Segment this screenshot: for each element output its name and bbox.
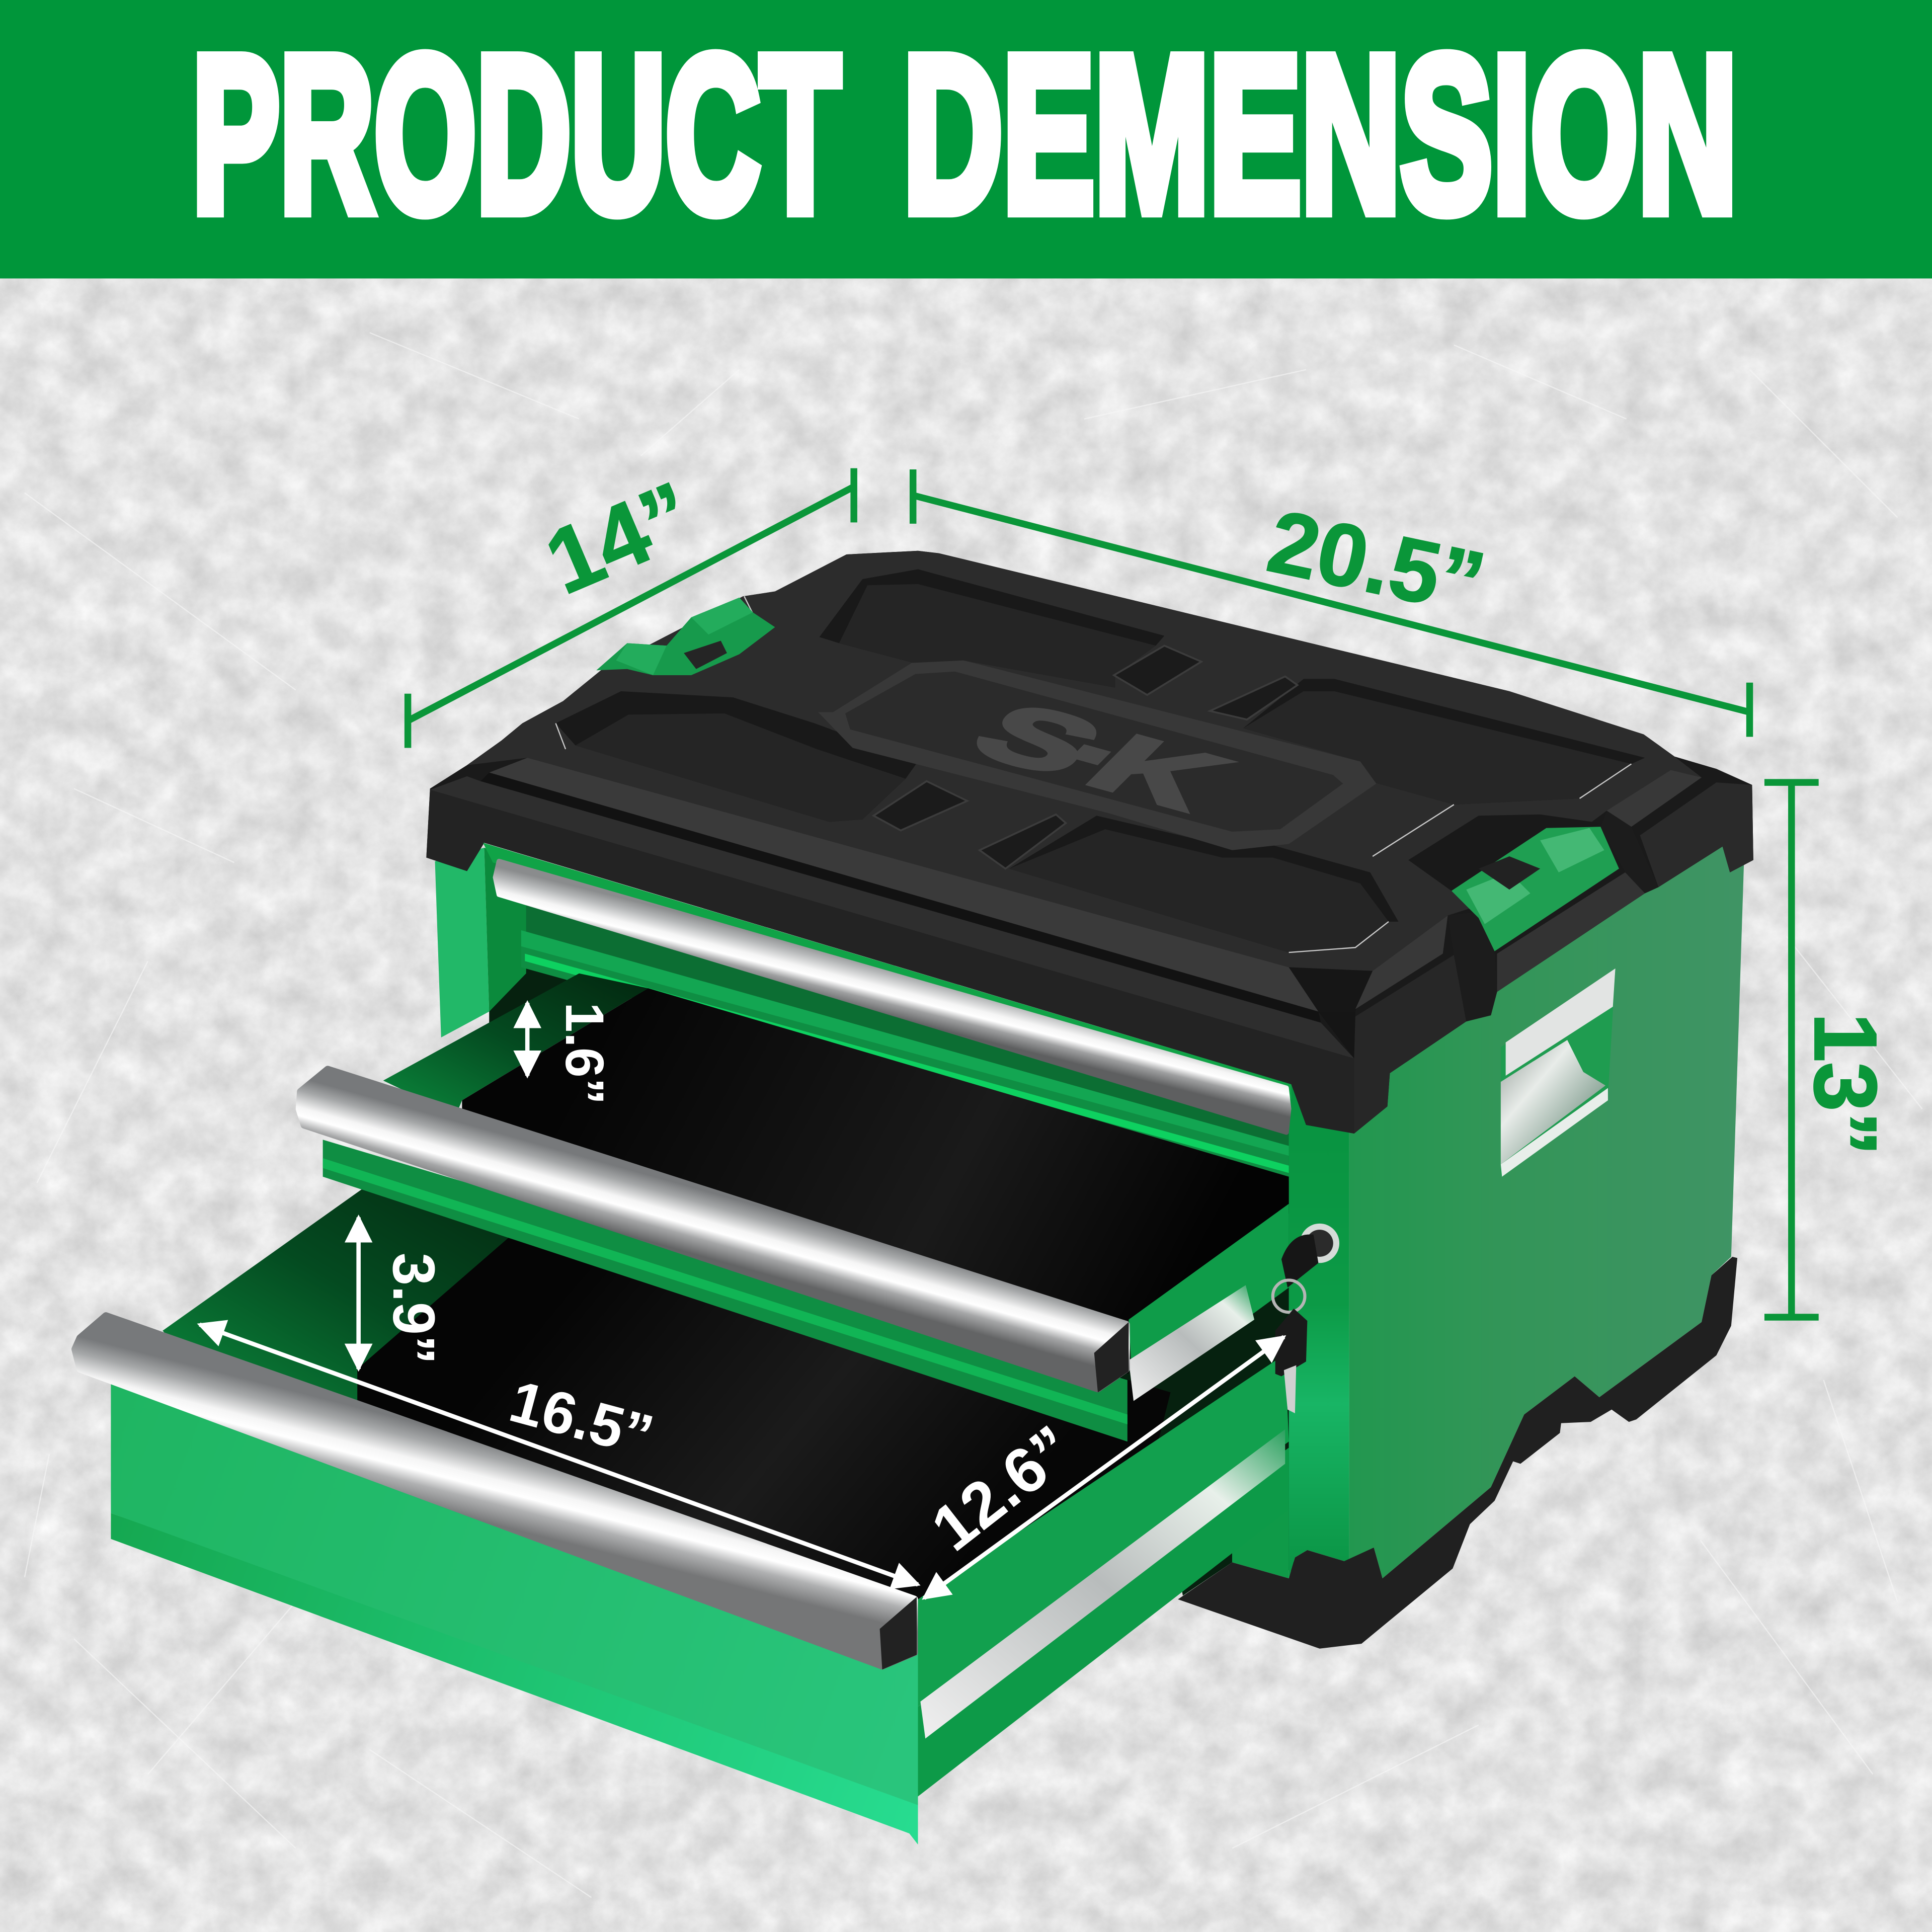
lid centre raised rim xyxy=(818,661,1377,850)
lid handle recesses xyxy=(873,646,1298,869)
title text: PRODUCT xyxy=(192,11,840,258)
bottom drawer front panel xyxy=(111,1367,918,1811)
lid highlight edges xyxy=(555,596,1631,952)
bottom drawer flange xyxy=(111,1513,918,1844)
toolbox xyxy=(75,551,1753,1844)
bottom drawer interior xyxy=(163,1177,1171,1614)
middle drawer front lip xyxy=(323,1140,1128,1441)
middle drawer handle xyxy=(299,1070,1126,1389)
lid panel: centre xyxy=(845,672,1343,832)
title banner xyxy=(0,0,1932,278)
dimension: 14 inch depth xyxy=(408,462,854,748)
dimension: 3.9 inch drawer height: 3.9” xyxy=(381,1253,447,1364)
black base bumper xyxy=(1178,1257,1737,1649)
dimension: 20.5 inch width xyxy=(913,469,1750,737)
bottom drawer rail xyxy=(920,1429,1285,1739)
dimension: 14 inch depth: 14” xyxy=(532,462,707,614)
lid panel: left xyxy=(576,713,906,822)
dimension: 13 inch height xyxy=(1764,782,1895,1317)
left latch xyxy=(596,598,775,675)
dimension: 12.6 inch drawer depth: 12.6” xyxy=(919,1412,1086,1564)
dimension: 16.5 inch drawer width: 16.5” xyxy=(503,1368,660,1469)
dimension: 1.6 inch drawer height: 1.6” xyxy=(554,1002,615,1105)
lid front skirt xyxy=(426,790,1354,1134)
middle drawer xyxy=(299,974,1289,1441)
lid xyxy=(426,551,1753,1134)
middle drawer rail xyxy=(1129,1285,1254,1401)
bottom drawer side xyxy=(918,1354,1289,1707)
lid panel: front xyxy=(1009,829,1389,952)
dimension: 13 inch height: 13” xyxy=(1796,1013,1895,1156)
S.K logo: S·K xyxy=(949,686,1249,826)
top drawer xyxy=(483,843,1292,1180)
lid top rim xyxy=(467,551,1702,971)
lid panels xyxy=(576,584,1631,952)
side carry handle xyxy=(1501,969,1616,1177)
lid panel bevels xyxy=(555,569,1645,952)
bottom drawer handle xyxy=(75,1316,914,1666)
dimension: 12.6 inch drawer depth xyxy=(919,1337,1284,1598)
lid panel: right xyxy=(1243,691,1631,804)
lid corner facets xyxy=(1289,967,1373,1012)
middle drawer side xyxy=(1129,1204,1289,1401)
dimension: 16.5 inch drawer width xyxy=(200,1325,918,1584)
lid front light band xyxy=(489,758,1318,1012)
front right pillar xyxy=(1289,1079,1349,1578)
lid panel: back xyxy=(839,584,1156,688)
cabinet body xyxy=(435,801,1746,1595)
right latch xyxy=(1408,815,1619,951)
dimension: 20.5 inch width: 20.5” xyxy=(1260,492,1493,633)
lid silhouette xyxy=(426,551,1753,1134)
top drawer handle xyxy=(495,861,1289,1133)
lock and keys xyxy=(1273,1224,1339,1413)
bottom drawer front xyxy=(75,1316,1289,1844)
